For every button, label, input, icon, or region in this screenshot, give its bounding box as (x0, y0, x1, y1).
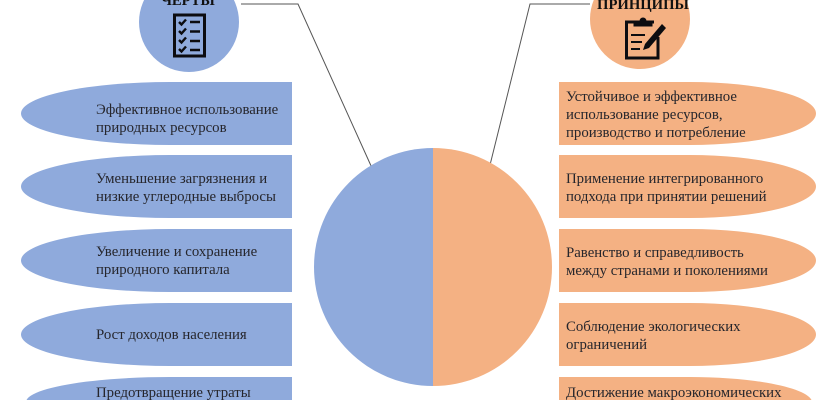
item: ecological limits (559, 303, 816, 366)
item: efficient resource use (21, 82, 292, 145)
item: efficient resource use: Эффективное использование (96, 102, 279, 118)
item: integrated approach: Применение интегрированного (566, 171, 763, 187)
item: sustainable use: производство и потребление (566, 125, 746, 141)
item: loss prevention (26, 377, 292, 400)
item: equity: между странами и поколениями (566, 263, 768, 279)
item: ecological limits: Соблюдение экологических (566, 319, 741, 335)
item: efficient resource use: природных ресурсов (96, 120, 227, 136)
item: integrated approach: подхода при принятии решений (566, 189, 767, 205)
item: natural capital: природного капитала (96, 262, 230, 278)
item: lower pollution: Уменьшение загрязнения и (96, 171, 267, 187)
panel: features list (21, 82, 292, 400)
panel: principles list (559, 82, 816, 400)
item: equity (559, 229, 816, 292)
connector line: principles (490, 4, 590, 165)
badge: features (139, 0, 239, 72)
item: sustainable use: использование ресурсов, (566, 107, 723, 123)
item: natural capital (21, 229, 292, 292)
item: sustainable use: Устойчивое и эффективное (566, 89, 737, 105)
item: income growth (21, 303, 292, 366)
item: lower pollution: низкие углеродные выбросы (96, 189, 276, 205)
item: sustainable use (559, 82, 816, 145)
item: lower pollution (21, 155, 292, 218)
connector line: features (241, 4, 372, 168)
item: income growth: Рост доходов населения (96, 327, 247, 343)
item: integrated approach (559, 155, 816, 218)
icon: checklist (174, 15, 204, 56)
item: natural capital: Увеличение и сохранение (96, 244, 258, 260)
badge: principles (590, 0, 690, 69)
icon: clipboard with pencil (626, 18, 666, 58)
item: ecological limits: ограничений (566, 337, 647, 353)
central circle (314, 148, 552, 386)
item: macroeconomic goals (559, 377, 812, 400)
item: equity: Равенство и справедливость (566, 245, 744, 261)
